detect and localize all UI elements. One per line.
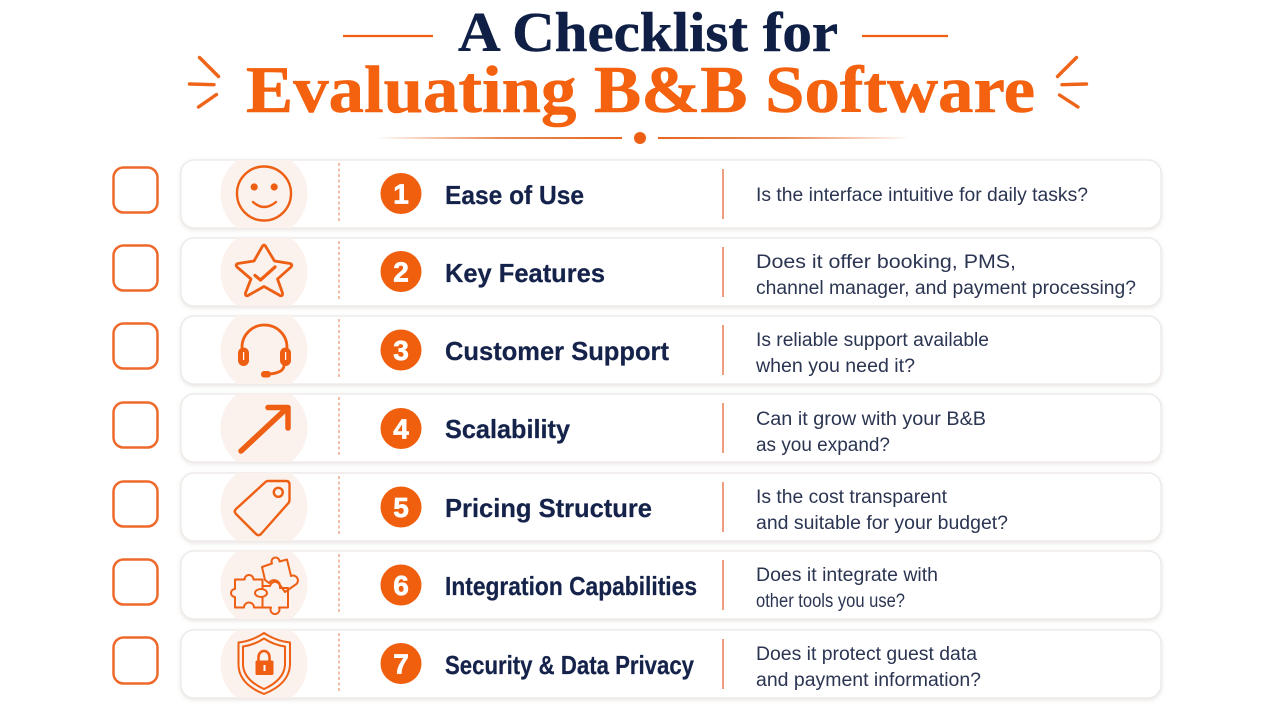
checklist row 1	[112, 159, 1163, 232]
question 4: Can it grow with your B&B	[756, 409, 986, 430]
question 4: as you expand?	[756, 435, 890, 456]
question 5	[756, 487, 1008, 534]
number badge 5	[380, 486, 422, 528]
question 3: when you need it?	[755, 356, 915, 377]
question 7: Does it protect guest data	[756, 644, 977, 665]
icon: puzzle pieces	[220, 551, 308, 619]
title line 1: A Checklist for	[458, 2, 838, 64]
card 3	[181, 316, 1161, 384]
checkbox 1	[114, 168, 158, 212]
label 6: Integration Capabilities	[445, 571, 697, 601]
question 2	[756, 252, 1136, 299]
question 6: other tools you use?	[756, 591, 905, 612]
number badge 2	[380, 251, 422, 292]
icon: growth arrow	[220, 394, 308, 462]
question 5: Is the cost transparent	[756, 487, 948, 508]
label 5: Pricing Structure	[445, 493, 652, 523]
icon: star with check	[220, 238, 308, 306]
question 4	[756, 409, 986, 456]
title rule right	[862, 35, 948, 37]
title line 2: Evaluating B&B Software	[246, 53, 1035, 127]
icon: price tag	[220, 473, 308, 541]
question 2: channel manager, and payment processing?	[756, 278, 1136, 299]
question 6: Does it integrate with	[756, 565, 938, 586]
question 3	[755, 330, 989, 377]
label 3: Customer Support	[445, 336, 669, 366]
icon: smiley	[220, 160, 308, 228]
question 6	[756, 565, 938, 612]
icon: headset	[220, 316, 308, 384]
number badge 6: 6	[393, 570, 409, 601]
question 3: Is reliable support available	[756, 330, 989, 351]
number badge 6	[380, 564, 422, 606]
checklist row 6	[112, 550, 1163, 622]
checkbox 6	[114, 560, 158, 604]
checkbox 4	[114, 402, 158, 448]
checkbox 2	[114, 246, 158, 290]
card 1	[181, 160, 1161, 228]
number badge 1: 1	[393, 178, 409, 210]
question 5: and suitable for your budget?	[756, 513, 1008, 534]
card 5	[181, 473, 1161, 541]
label 1: Ease of Use	[445, 180, 584, 210]
checklist row 5	[112, 472, 1163, 544]
sunburst left	[190, 58, 218, 107]
number badge 2: 2	[393, 256, 409, 288]
label 7: Security & Data Privacy	[445, 650, 694, 680]
number badge 3: 3	[393, 335, 409, 366]
label 2: Key Features	[445, 258, 605, 288]
checkbox 7	[114, 638, 158, 684]
checkbox 3	[114, 324, 158, 368]
card 6	[181, 551, 1161, 619]
checklist row 3	[112, 315, 1163, 388]
checklist row 2	[112, 237, 1163, 310]
number badge 4: 4	[393, 414, 409, 444]
title rule left	[343, 35, 433, 37]
number badge 1	[380, 173, 422, 214]
card 4	[181, 394, 1161, 462]
icon: security shield	[220, 630, 308, 698]
question 7	[756, 644, 981, 691]
checkbox 5	[114, 482, 158, 526]
question 1: Is the interface intuitive for daily tasks?	[756, 185, 1088, 206]
checklist row 4	[112, 393, 1163, 466]
number badge 7: 7	[393, 648, 409, 680]
sunburst right	[1058, 58, 1086, 107]
number badge 7	[380, 643, 422, 684]
number badge 4	[380, 408, 422, 449]
checklist row 7	[112, 629, 1163, 702]
number badge 5: 5	[393, 492, 409, 523]
label 4: Scalability	[445, 414, 571, 444]
underline ornament	[376, 132, 910, 144]
question 2: Does it offer booking, PMS,	[756, 252, 1016, 273]
title block	[190, 2, 1086, 144]
card 2	[181, 238, 1161, 306]
number badge 3	[380, 330, 422, 370]
card 7	[181, 630, 1161, 698]
question 7: and payment information?	[756, 670, 981, 691]
